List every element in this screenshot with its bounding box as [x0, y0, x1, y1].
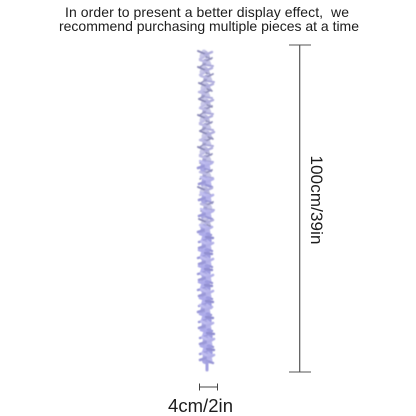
garland illustration	[198, 51, 214, 370]
height dimension line	[289, 45, 311, 372]
width dimension line	[200, 384, 218, 390]
heading: In order to present a better display effect, we	[65, 4, 349, 20]
width label: 4cm/2in	[168, 395, 233, 416]
heading	[59, 4, 359, 34]
heading: recommend purchasing multiple pieces at a time	[59, 18, 359, 34]
height label: 100cm/39in	[307, 156, 326, 244]
